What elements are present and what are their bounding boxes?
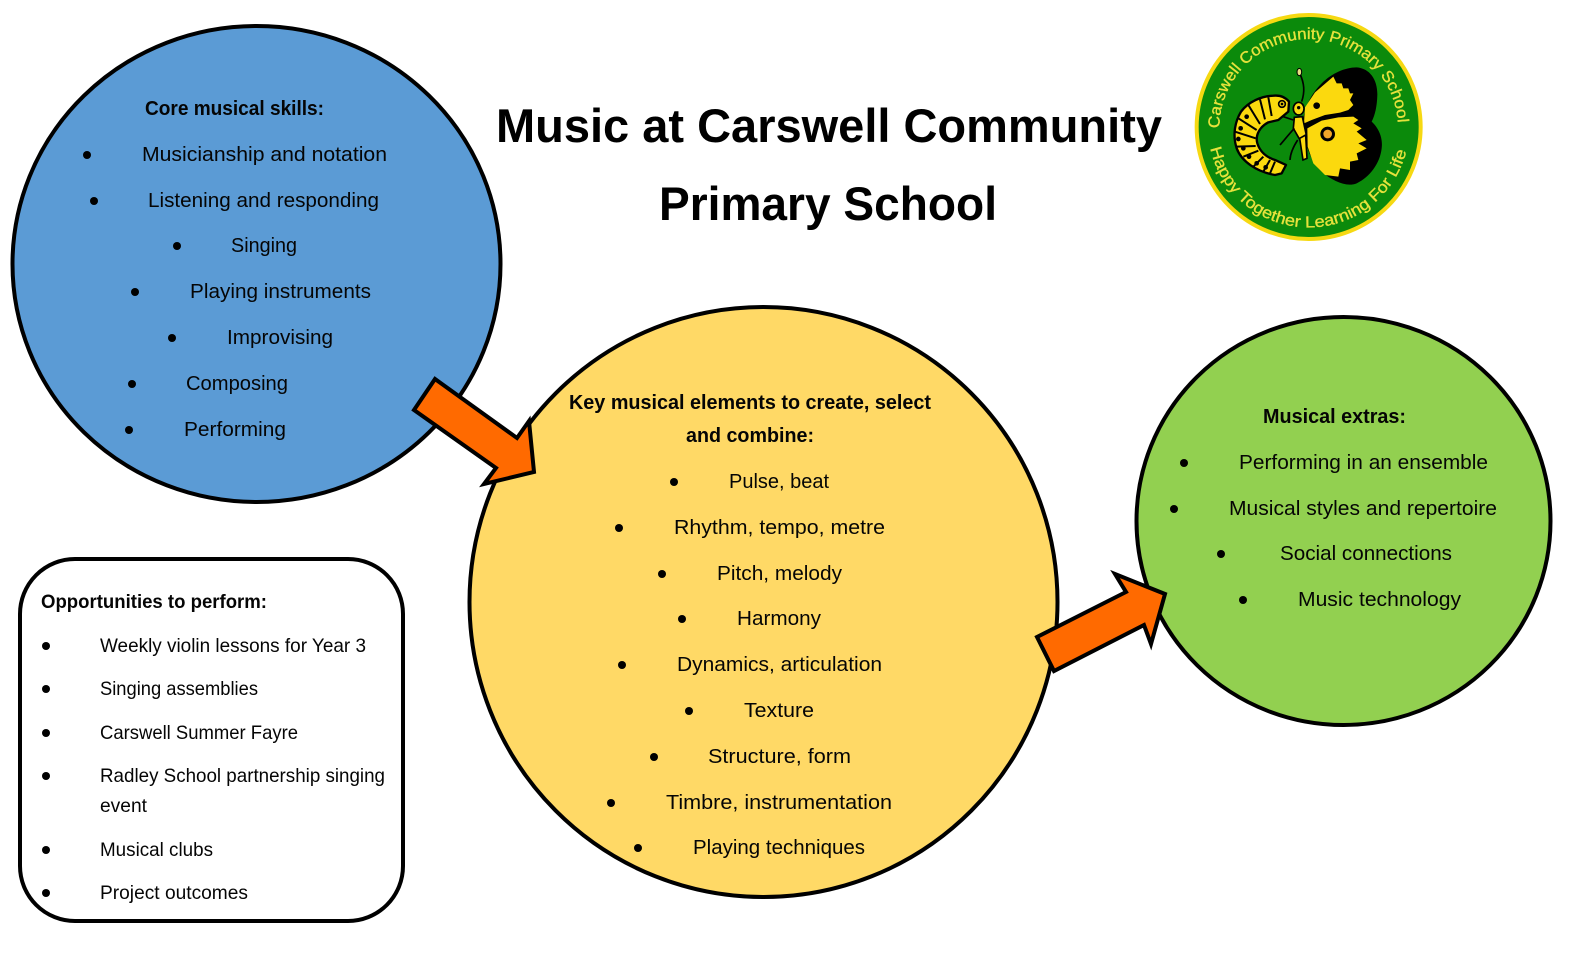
- panel: key musical elements: Texture: [744, 699, 814, 722]
- panel: opportunities to perform: event: [100, 795, 148, 817]
- panel: opportunities to perform: Radley School partnership singing: [100, 765, 385, 787]
- arrow: key elements to musical extras: [1037, 574, 1165, 671]
- panel: key musical elements: Rhythm, tempo, metre: [674, 516, 885, 539]
- panel: musical extras: Social connections: [1280, 542, 1452, 565]
- title: Music at Carswell Community: [496, 100, 1163, 153]
- panel: core musical skills: Core musical skills:: [145, 97, 324, 120]
- arrow: core skills to key elements: [414, 379, 534, 484]
- icon: butterfly: [1280, 67, 1382, 185]
- panel: musical extras: Music technology: [1298, 588, 1462, 611]
- panel: opportunities to perform: Musical clubs: [100, 839, 213, 861]
- panel: key musical elements: Timbre, instrumentation: [666, 791, 892, 814]
- panel: musical extras: Musical extras:: [1263, 405, 1406, 428]
- panel: opportunities to perform: Singing assemblies: [100, 678, 258, 700]
- panel: musical extras: [1136, 317, 1550, 725]
- panel: key musical elements: Key musical elements to create, select: [569, 391, 931, 414]
- panel: key musical elements: and combine:: [686, 424, 814, 447]
- icon: school logo: Carswell Community Primary School: [1208, 27, 1410, 128]
- panel: opportunities to perform: Carswell Summer Fayre: [100, 722, 298, 744]
- panel: key musical elements: Dynamics, articulation: [677, 653, 882, 676]
- panel: core musical skills: Listening and responding: [148, 189, 379, 212]
- panel: core musical skills: Playing instruments: [190, 280, 371, 303]
- title: Primary School: [659, 178, 997, 231]
- panel: opportunities to perform: Weekly violin lessons for Year 3: [100, 635, 366, 657]
- icon: caterpillar: [1235, 96, 1289, 175]
- panel: core musical skills: Singing: [231, 234, 297, 257]
- panel: opportunities to perform: Opportunities to perform:: [41, 591, 267, 613]
- panel: core musical skills: Composing: [186, 372, 288, 395]
- panel: key musical elements: Pulse, beat: [729, 470, 829, 493]
- panel: key musical elements: Playing techniques: [693, 836, 865, 859]
- panel: musical extras: Musical styles and repertoire: [1229, 497, 1497, 520]
- icon: school logo: Happy Together Learning For Life: [1210, 146, 1406, 228]
- panel: key musical elements: Structure, form: [708, 745, 851, 768]
- panel: opportunities to perform: [20, 559, 403, 921]
- panel: key musical elements: Harmony: [737, 607, 822, 630]
- title: [496, 100, 1163, 231]
- panel: key musical elements: Pitch, melody: [717, 562, 843, 585]
- panel: core musical skills: Musicianship and notation: [142, 143, 387, 166]
- panel: musical extras: Performing in an ensemble: [1239, 451, 1488, 474]
- panel: core musical skills: Performing: [184, 418, 286, 441]
- icon: school logo: [1194, 13, 1423, 241]
- panel: key musical elements: [470, 307, 1058, 897]
- panel: core musical skills: Improvising: [227, 326, 333, 349]
- panel: opportunities to perform: Project outcomes: [100, 882, 248, 904]
- panel: core musical skills: [12, 26, 500, 502]
